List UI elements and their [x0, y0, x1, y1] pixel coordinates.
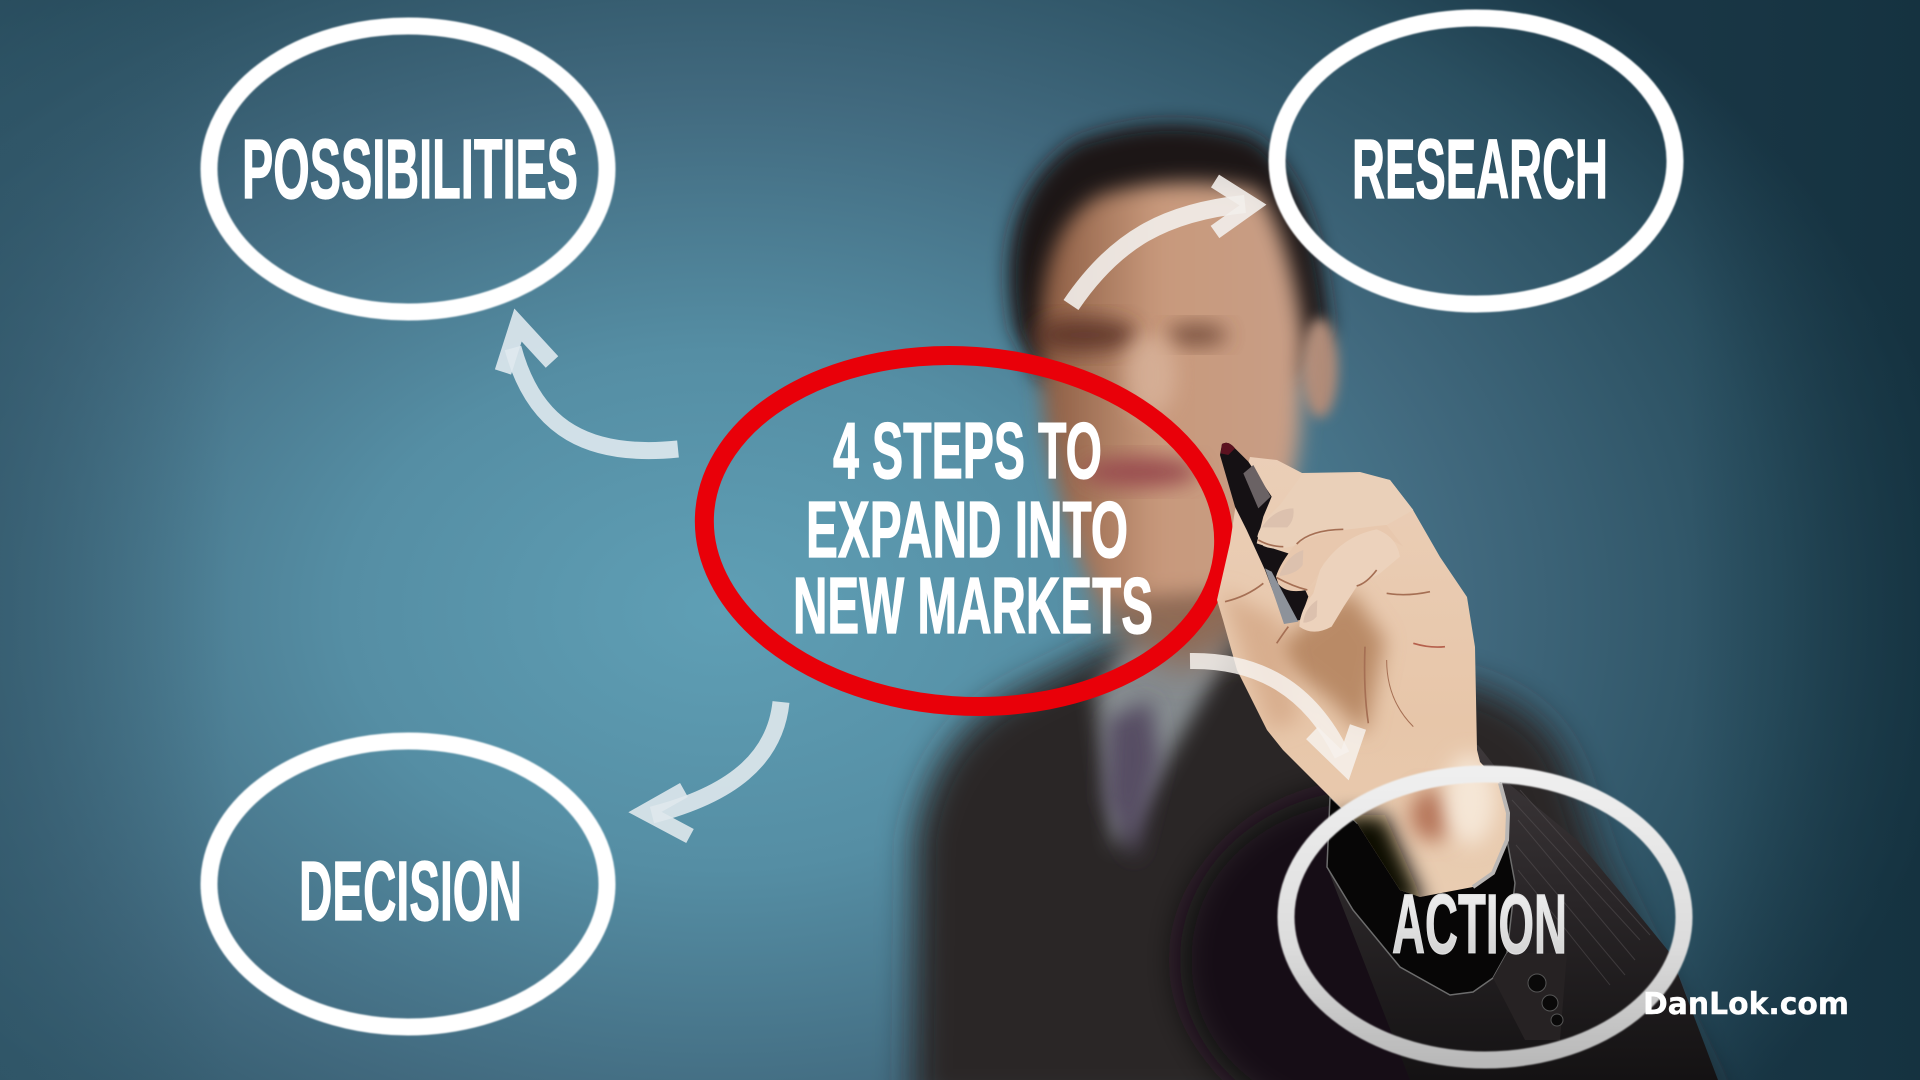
central title: [793, 406, 1153, 650]
wrist shadow: [1335, 815, 1425, 910]
hair: [1009, 124, 1330, 380]
central red ellipse: [692, 338, 1236, 724]
blurred businessman figure: [912, 124, 1720, 1080]
ellipse: possibilities: [209, 26, 607, 312]
marker pen: [1220, 443, 1308, 624]
label: research: RESEARCH: [1352, 122, 1608, 216]
writing hand base: [1217, 457, 1506, 897]
face: [1040, 182, 1304, 600]
ellipse: research: [1277, 18, 1675, 304]
central title: 4 STEPS TO: [833, 406, 1102, 495]
sleeve buttons: [1528, 974, 1563, 1026]
fingers gripping pen: [1225, 473, 1445, 727]
fingernails: [1262, 508, 1317, 623]
watermark: DanLok.com: [1643, 987, 1849, 1022]
tie: [1105, 700, 1160, 860]
neck: [1090, 520, 1280, 670]
nose highlight: [1124, 333, 1176, 417]
dark lower suit shading: [1180, 790, 1560, 1080]
label: decision: DECISION: [299, 844, 522, 938]
left palm shading: [1220, 590, 1300, 730]
label: action: ACTION: [1392, 877, 1567, 971]
ellipse: decision: [209, 741, 607, 1027]
arrow: centre to decision: [645, 702, 781, 836]
sleeve pinstripes: [1512, 790, 1650, 985]
sleeve opening: [1327, 797, 1515, 995]
wrist orange tone: [1410, 789, 1454, 841]
ellipse: action: [1286, 774, 1684, 1060]
ear: [1302, 318, 1338, 418]
palm hollow shadow: [1265, 590, 1385, 735]
left eye shadow: [1033, 318, 1137, 352]
arrow: centre to action: [1190, 661, 1358, 765]
shirt cuff edge: [1473, 783, 1508, 887]
suit body: [912, 640, 1720, 1080]
finger creases: [1225, 529, 1445, 727]
central title: EXPAND INTO: [806, 485, 1128, 574]
shirt and collar: [1095, 610, 1225, 850]
suit sleeve: [1327, 745, 1718, 1080]
wrist highlight: [1444, 755, 1496, 845]
mouth: [1082, 457, 1198, 487]
vent: [1493, 953, 1567, 1040]
label: possibilities: POSSIBILITIES: [242, 122, 578, 216]
arrow: centre to research: [1071, 181, 1253, 305]
right eye shadow: [1167, 324, 1227, 346]
arrow: centre to possibilities: [503, 325, 678, 451]
central title: NEW MARKETS: [793, 561, 1153, 650]
